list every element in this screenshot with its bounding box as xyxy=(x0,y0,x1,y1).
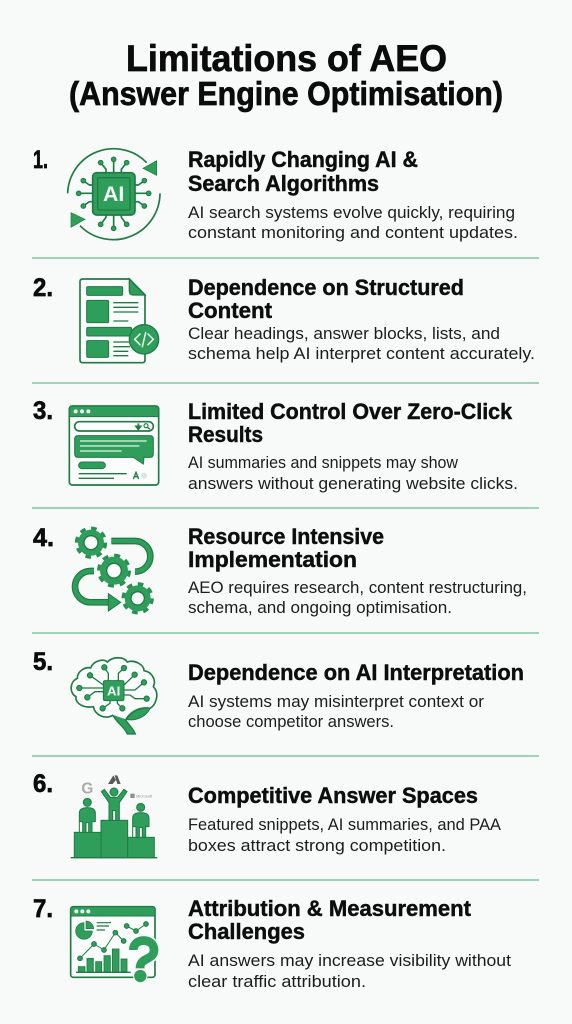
heading xyxy=(188,524,384,572)
heading: Dependence on Structured xyxy=(188,275,464,300)
heading: Results xyxy=(188,422,263,447)
icon: podium with three figures and brands: G xyxy=(81,781,93,798)
text block: answers without generating website clicks. xyxy=(188,474,518,493)
text block: schema help AI interpret content accurately. xyxy=(188,344,535,363)
heading: Challenges xyxy=(188,919,305,944)
text block xyxy=(188,951,511,991)
number 3: 3. xyxy=(33,397,53,425)
text block xyxy=(188,692,484,731)
heading: Competitive Answer Spaces xyxy=(188,783,478,808)
text block: AI search systems evolve quickly, requiring xyxy=(188,203,515,222)
heading: Content xyxy=(188,298,273,323)
text block: Clear headings, answer blocks, lists, and xyxy=(188,324,500,343)
text block xyxy=(188,815,502,855)
text block: AI systems may misinterpret context or xyxy=(188,692,484,711)
panel: item 3 zero-click results xyxy=(33,397,518,493)
icon: brain with AI chip: AI xyxy=(107,683,120,698)
heading: Implementation xyxy=(188,547,357,572)
title xyxy=(69,38,503,112)
icon: AI chip with cycle arrows: AI xyxy=(103,182,124,206)
text block: schema, and ongoing optimisation. xyxy=(188,598,452,617)
text block: Featured snippets, AI summaries, and PAA xyxy=(188,815,502,834)
heading xyxy=(188,147,418,196)
heading xyxy=(188,275,464,323)
text block xyxy=(188,453,518,493)
icon: analytics dashboard with question mark xyxy=(71,907,155,983)
heading: Attribution & Measurement xyxy=(188,896,472,921)
heading: Dependence on AI Interpretation xyxy=(188,660,524,685)
icon: podium with three figures and brands: Microsoft xyxy=(136,793,153,798)
text block: boxes attract strong competition. xyxy=(188,836,446,855)
icon: brain with AI chip xyxy=(71,658,157,734)
panel: item 4 resource intensive xyxy=(33,524,527,617)
number 5: 5. xyxy=(33,648,53,676)
panel: item 5 AI interpretation xyxy=(33,648,524,734)
title: (Answer Engine Optimisation) xyxy=(69,75,503,112)
text block: AI answers may increase visibility without xyxy=(188,951,511,970)
heading: Resource Intensive xyxy=(188,524,384,549)
text block xyxy=(188,578,527,617)
icon: browser window with answer bubble xyxy=(69,406,159,485)
text block: AEO requires research, content restructuring, xyxy=(188,578,527,597)
icon: gears with process arrows xyxy=(75,529,151,612)
number 6: 6. xyxy=(33,770,53,798)
heading xyxy=(188,399,513,447)
heading: Limited Control Over Zero-Click xyxy=(188,399,513,424)
panel: item 1 rapidly changing algorithms xyxy=(33,146,518,242)
icon: document with code badge xyxy=(80,279,159,363)
heading: Search Algorithms xyxy=(188,171,379,196)
title: Limitations of AEO xyxy=(126,38,447,79)
text block xyxy=(188,203,518,242)
panel: item 6 competitive answer spaces xyxy=(33,770,502,858)
text block: AI summaries and snippets may show xyxy=(188,453,459,472)
heading: Rapidly Changing AI & xyxy=(188,147,418,172)
text block xyxy=(188,324,535,363)
number 2: 2. xyxy=(33,274,53,302)
panel: item 7 attribution and measurement xyxy=(33,895,511,991)
text block: choose competitor answers. xyxy=(188,712,394,731)
icon: podium with three figures and brands xyxy=(71,775,157,858)
number 4: 4. xyxy=(33,524,54,552)
text block: clear traffic attribution. xyxy=(188,972,366,991)
heading xyxy=(188,896,472,944)
text block: constant monitoring and content updates. xyxy=(188,223,518,242)
number 1: 1. xyxy=(33,146,48,174)
panel: item 2 structured content xyxy=(33,274,535,363)
number 7: 7. xyxy=(33,895,53,923)
icon: AI chip with cycle arrows xyxy=(68,149,160,240)
